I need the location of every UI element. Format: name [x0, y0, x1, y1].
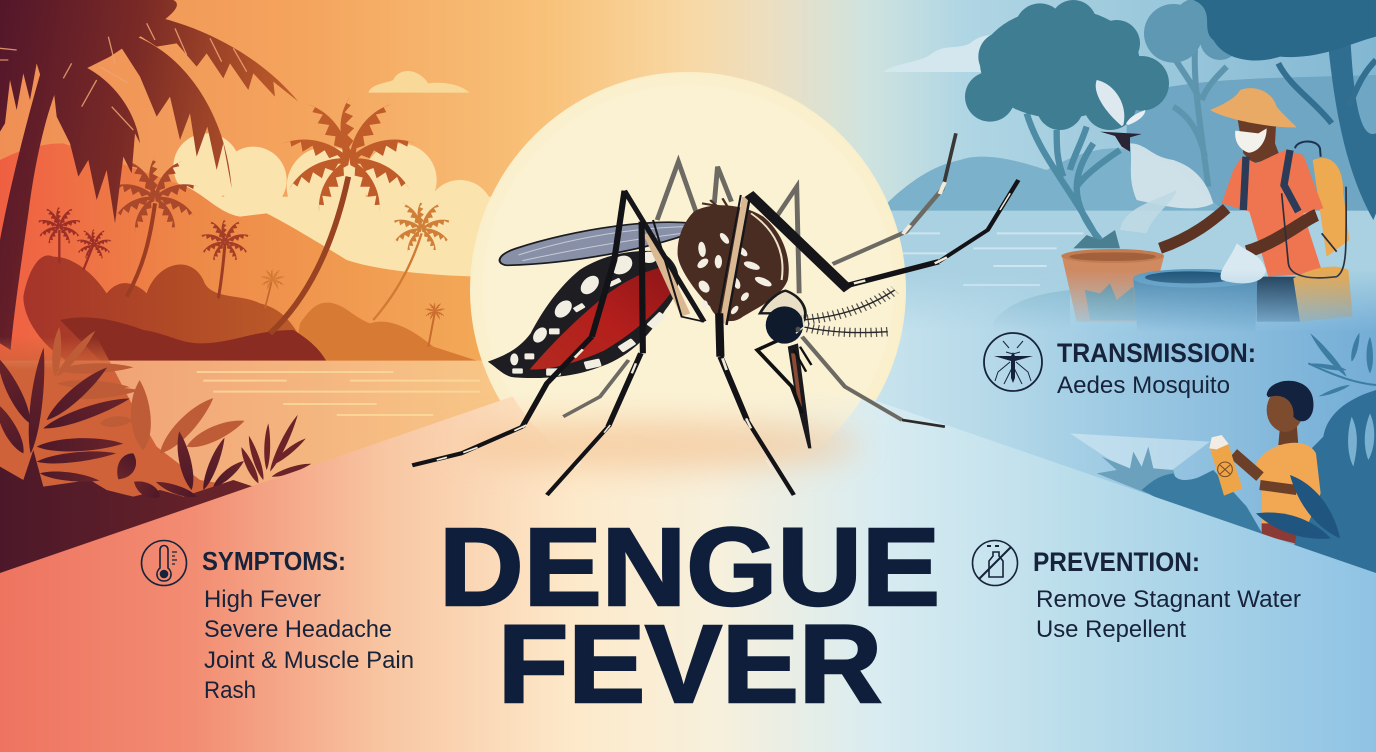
- frond C: [50, 57, 140, 223]
- spray beam: [1070, 433, 1210, 487]
- person: [1160, 88, 1353, 322]
- small cloud: [368, 71, 469, 93]
- title line 2: FEVER: [498, 603, 882, 726]
- prevention heading: PREVENTION:: [1033, 547, 1200, 577]
- panel: tropical sunset scene: [0, 0, 540, 501]
- shirt: [1222, 150, 1323, 277]
- back tree: [1144, 0, 1240, 187]
- frond A: [100, 10, 298, 102]
- blue barrel: [1133, 269, 1257, 332]
- femurs: [624, 191, 848, 325]
- sea: [0, 361, 520, 501]
- neck and head: [1237, 113, 1280, 163]
- palm: mid left: [111, 156, 199, 297]
- icon: crossed bottle: [972, 540, 1018, 586]
- title line 1: DENGUE: [439, 506, 940, 629]
- palm: small pair: [36, 205, 113, 270]
- sun glow over floor: [483, 85, 893, 495]
- tree right: [1193, 0, 1376, 220]
- repellent bottle: [1209, 435, 1242, 496]
- foliage backdrop: [0, 337, 240, 573]
- proboscis and palps: [757, 341, 811, 448]
- leg bands: [903, 182, 945, 234]
- panel: prevention: [972, 540, 1301, 643]
- hair: [1267, 381, 1313, 421]
- foreground palm: [0, 0, 298, 350]
- straps: [1243, 150, 1298, 212]
- right foliage: [1293, 390, 1376, 580]
- symptoms list: Rash: [204, 677, 256, 704]
- child body: [1209, 381, 1340, 543]
- mid bushes: [293, 303, 477, 361]
- symptoms list: [204, 586, 414, 704]
- panel: foreground jungle foliage: [0, 326, 312, 573]
- black legs: [412, 180, 1018, 495]
- cloud bank: [173, 133, 540, 280]
- frond B: [110, 30, 232, 188]
- arms: [1160, 208, 1227, 248]
- palm: tiny: [259, 268, 286, 308]
- main illustration: Aedes mosquito: [412, 133, 1018, 495]
- far hill: [1127, 75, 1376, 233]
- icon: thermometer: [142, 540, 186, 586]
- lower pack: [1293, 267, 1353, 322]
- symptoms list: High Fever: [204, 586, 321, 613]
- panel: transmission: [984, 333, 1256, 399]
- palm small far right: [424, 302, 446, 347]
- hose: [1282, 187, 1346, 278]
- clay pot: [1061, 249, 1164, 322]
- leaf sprig: [1308, 332, 1376, 398]
- head: [766, 306, 804, 344]
- wing: [500, 222, 708, 265]
- cloud: [883, 35, 1037, 72]
- panel: child with repellent: [1070, 332, 1376, 580]
- panel: symptoms: [142, 540, 414, 704]
- legs: [1257, 277, 1300, 322]
- rear grey legs: [563, 133, 956, 427]
- transmission heading: TRANSMISSION:: [1057, 338, 1256, 368]
- tree left: [965, 0, 1169, 243]
- hills: [0, 143, 493, 367]
- symptoms list: Joint & Muscle Pain: [204, 647, 414, 674]
- neck: [760, 291, 805, 320]
- prevention list: Use Repellent: [1036, 616, 1186, 643]
- symptoms list: Severe Headache: [204, 616, 392, 643]
- frond highlights: [0, 23, 247, 130]
- prevention list: [1036, 586, 1301, 643]
- frond D: [0, 43, 47, 132]
- spray wisp: [1120, 190, 1177, 233]
- grass: [1097, 447, 1180, 493]
- far palm: right: [373, 200, 453, 320]
- title: Dengue Fever: [439, 506, 940, 726]
- hat: [1210, 88, 1297, 127]
- transmission text: Aedes Mosquito: [1057, 372, 1230, 399]
- panel: prevention scene: [860, 0, 1376, 333]
- sun disc: [470, 72, 906, 508]
- crown top: [0, 0, 177, 77]
- trunk: [0, 63, 62, 350]
- water: [860, 211, 1376, 331]
- palm: tall centre: [270, 96, 417, 333]
- icon: mosquito: [984, 333, 1042, 391]
- prevention list: Remove Stagnant Water: [1036, 586, 1301, 613]
- plant by pot: [1073, 230, 1120, 248]
- mask: [1235, 128, 1267, 153]
- bush: [1142, 470, 1270, 547]
- face: [1267, 388, 1303, 432]
- small fern: [238, 413, 312, 485]
- antennae: [802, 290, 895, 333]
- palm: mid: [199, 218, 251, 298]
- symptoms heading: SYMPTOMS:: [202, 546, 346, 576]
- backpack: [1313, 158, 1349, 257]
- blue lower panel: [876, 274, 1376, 544]
- floor wedge: [0, 336, 1376, 752]
- abdomen: [488, 251, 679, 378]
- mosquito ground shadow: [460, 421, 860, 469]
- dark leaves: [0, 347, 246, 503]
- orange leaves: [50, 326, 247, 459]
- spray cloud: [1130, 143, 1213, 208]
- water streaks: [887, 233, 1083, 285]
- thorax: [678, 198, 789, 321]
- near hill: [880, 148, 1227, 213]
- white leg bands: [437, 193, 1010, 468]
- small flying mosquito: [1096, 80, 1145, 152]
- small bush: [993, 290, 1070, 333]
- spray bottle bag: [1221, 243, 1266, 283]
- dark foliage mass: [0, 450, 253, 573]
- near island silhouette: [23, 255, 326, 361]
- front leaves: [1290, 475, 1340, 538]
- sea reflections: [197, 372, 480, 415]
